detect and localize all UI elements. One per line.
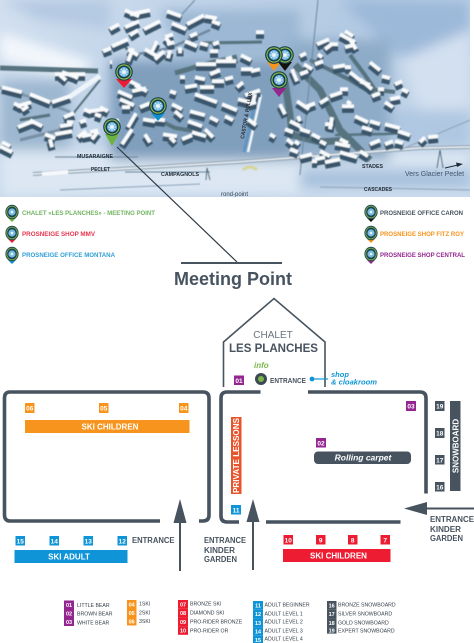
level key: adult: 11	[255, 604, 261, 610]
zone: ski children orange	[25, 403, 190, 433]
badge 01	[234, 376, 244, 385]
buildings	[0, 13, 438, 165]
chalet name	[229, 330, 318, 355]
map labels: MUSARAIGNE	[77, 154, 113, 160]
ski lift and pistes	[33, 0, 470, 190]
zone: ski adult blue: 15	[17, 538, 24, 545]
badge 11: 11	[233, 507, 240, 514]
chalet house outline	[224, 298, 325, 387]
meeting point leader line	[117, 147, 282, 263]
map pin: red MMV	[115, 63, 133, 88]
level key: bears: 02	[66, 612, 72, 618]
level key: snowboard: 16	[329, 604, 335, 610]
map labels: PECLET	[91, 167, 111, 173]
shop and cloakroom callout: & cloakroom	[331, 378, 377, 386]
legend item: shop Fitz Roy: PROSNEIGE SHOP FITZ ROY	[380, 231, 465, 238]
zone: ski children red: 7	[383, 537, 387, 544]
level key: bears: BROWN BEAR	[77, 612, 113, 618]
level key: bronze and pro-rider: 07	[180, 602, 186, 608]
zone: ski adult blue	[14, 536, 128, 563]
zone: ski adult blue: 13	[85, 538, 92, 545]
level key: bronze and pro-rider: PRO-RIDER BRONZE	[190, 620, 243, 626]
entrance kinder garden right: GARDEN	[430, 534, 463, 543]
level key: adult: 13	[255, 621, 261, 627]
legend item: chalet: CHALET «LES PLANCHES» - MEETING POINT	[22, 210, 155, 217]
level key: bears	[64, 600, 113, 626]
level key: snowboard	[327, 601, 396, 634]
level key: bears: 03	[66, 620, 72, 626]
legend item: shop Central: PROSNEIGE SHOP CENTRAL	[380, 252, 465, 259]
chalet name: CHALET	[253, 330, 293, 341]
aerial resort map: rond-point	[221, 192, 248, 198]
level key: snowboard: GOLD SNOWBOARD	[338, 620, 389, 626]
zone: snowboard: 16	[436, 484, 444, 491]
map pin: green Les Planches	[103, 118, 121, 146]
legend item: shop MMV: PROSNEIGE SHOP MMV	[22, 231, 96, 238]
legend item: shop MMV	[5, 226, 96, 243]
private lessons bar: PRIVATE LESSONS	[232, 417, 241, 493]
badge 02	[316, 438, 326, 448]
rolling carpet: Rolling carpet	[335, 452, 392, 462]
zone: ski children orange: SKI CHILDREN	[82, 422, 139, 432]
zone: snowboard: SNOWBOARD	[451, 419, 460, 473]
level key: snowboard: EXPERT SNOWBOARD	[338, 628, 395, 634]
level key: adult	[253, 601, 310, 643]
level key: adult: ADULT BEGINNER	[264, 602, 310, 608]
legend: locations right	[364, 205, 465, 264]
entrance kinder garden left: KINDER	[204, 546, 235, 555]
zone: ski children orange: 06	[26, 406, 34, 412]
badge 01: 01	[235, 378, 243, 385]
level key: bronze and pro-rider: 09	[180, 620, 186, 626]
map pin: black Caron	[265, 46, 294, 71]
legend item: office Montana: PROSNEIGE OFFICE MONTANA	[22, 252, 116, 259]
level key: bronze and pro-rider: BRONZE SKI	[190, 602, 221, 608]
zone: ski adult blue: 14	[51, 538, 58, 545]
level key: ski 1-3: 04	[129, 602, 136, 608]
entrance kinder garden right: ENTRANCE	[430, 515, 474, 524]
badge 11	[231, 505, 241, 514]
aerial resort map: Vers Glacier Peclet	[405, 171, 464, 178]
badge 03	[406, 401, 416, 411]
level key: ski 1-3	[127, 600, 150, 626]
level key: bronze and pro-rider: 10	[180, 628, 186, 634]
map labels: CASCADES	[364, 187, 392, 193]
zone: snowboard	[435, 401, 460, 492]
right room outline	[221, 392, 426, 522]
entrance kinder garden left: ENTRANCE	[204, 536, 247, 545]
level key: bears: 01	[66, 603, 72, 609]
level key: bronze and pro-rider: DIAMOND SKI	[190, 610, 224, 616]
zone: ski children red: 9	[319, 537, 323, 544]
level key: ski 1-3: 1SKI	[139, 602, 150, 608]
map labels	[77, 92, 392, 193]
legend item: chalet	[5, 205, 155, 222]
level key: snowboard: BRONZE SNOWBOARD	[338, 602, 396, 608]
zone: ski children red	[283, 535, 390, 562]
badge 03: 03	[407, 404, 415, 410]
map labels: STADES	[362, 164, 383, 170]
level key: snowboard: SILVER SNOWBOARD	[338, 612, 392, 618]
rolling carpet	[314, 452, 411, 464]
level key: adult: ADULT LEVEL 2	[264, 620, 303, 626]
zone: snowboard: 17	[436, 457, 444, 464]
zone: ski children red: 8	[351, 537, 355, 544]
level key: snowboard: 19	[329, 628, 335, 634]
legend: locations left	[5, 205, 155, 264]
level key: ski 1-3: 05	[129, 611, 135, 617]
map pin: blue Montana	[149, 97, 167, 121]
badge 02: 02	[317, 440, 325, 447]
zone: ski children red: SKI CHILDREN	[310, 552, 367, 560]
level key: adult: ADULT LEVEL 4	[264, 636, 303, 642]
arrow from right	[404, 502, 474, 515]
map pin: orange Fitz Roy	[265, 46, 283, 71]
zone: ski children orange: 05	[100, 406, 108, 412]
zone: ski adult blue: SKI ADULT	[48, 552, 90, 562]
entrance label: ski adult: ENTRANCE	[132, 536, 175, 545]
heading: Meeting Point: Meeting Point	[174, 268, 292, 289]
shop and cloakroom callout	[310, 370, 377, 386]
level key: bronze and pro-rider	[178, 600, 243, 635]
map labels: CASTOR & POLLUX	[240, 92, 254, 139]
zone: ski adult blue: 12	[119, 538, 126, 545]
level key: snowboard: 17	[329, 612, 335, 618]
level key: ski 1-3: 06	[129, 620, 135, 626]
level key: ski 1-3: 3SKI	[139, 619, 150, 625]
level key: bears: WHITE BEAR	[77, 620, 110, 626]
chalet name: LES PLANCHES	[229, 341, 318, 355]
shop and cloakroom callout: shop	[331, 370, 349, 379]
level key: adult: ADULT LEVEL 3	[264, 628, 303, 634]
legend item: office Montana	[5, 247, 116, 264]
entrance marker	[255, 373, 267, 385]
entrance kinder garden left: GARDEN	[204, 555, 237, 564]
zone: snowboard: 19	[436, 404, 444, 410]
entrance kinder garden left	[204, 536, 247, 564]
arrow up left	[174, 499, 186, 571]
level key: adult: 14	[255, 630, 262, 636]
aerial resort map	[0, 0, 470, 198]
zone: ski children orange: 04	[180, 406, 188, 412]
left room outline	[4, 392, 209, 521]
level key: bronze and pro-rider: 08	[180, 611, 186, 617]
level key: bears: LITTLE BEAR	[77, 603, 110, 609]
map pin: purple Central	[270, 71, 288, 97]
info label: info	[254, 361, 269, 370]
arrow up right	[246, 499, 260, 570]
zone: snowboard: 18	[436, 430, 444, 438]
entrance kinder garden right: KINDER	[430, 525, 461, 534]
entrance kinder garden right	[430, 515, 474, 543]
map labels: CAMPAGNOLS	[161, 172, 199, 178]
zone: ski children red: 10	[285, 537, 292, 544]
level key: snowboard: 18	[329, 621, 335, 627]
legend item: office Caron: PROSNEIGE OFFICE CARON	[380, 210, 464, 217]
level key: adult: 12	[255, 612, 261, 618]
level key: bronze and pro-rider: PRO-RIDER OR	[190, 628, 229, 634]
entrance label: ENTRANCE	[270, 376, 306, 385]
level key: ski 1-3: 2SKI	[139, 610, 150, 616]
roads	[0, 30, 405, 160]
level key: adult: ADULT LEVEL 1	[264, 612, 303, 618]
